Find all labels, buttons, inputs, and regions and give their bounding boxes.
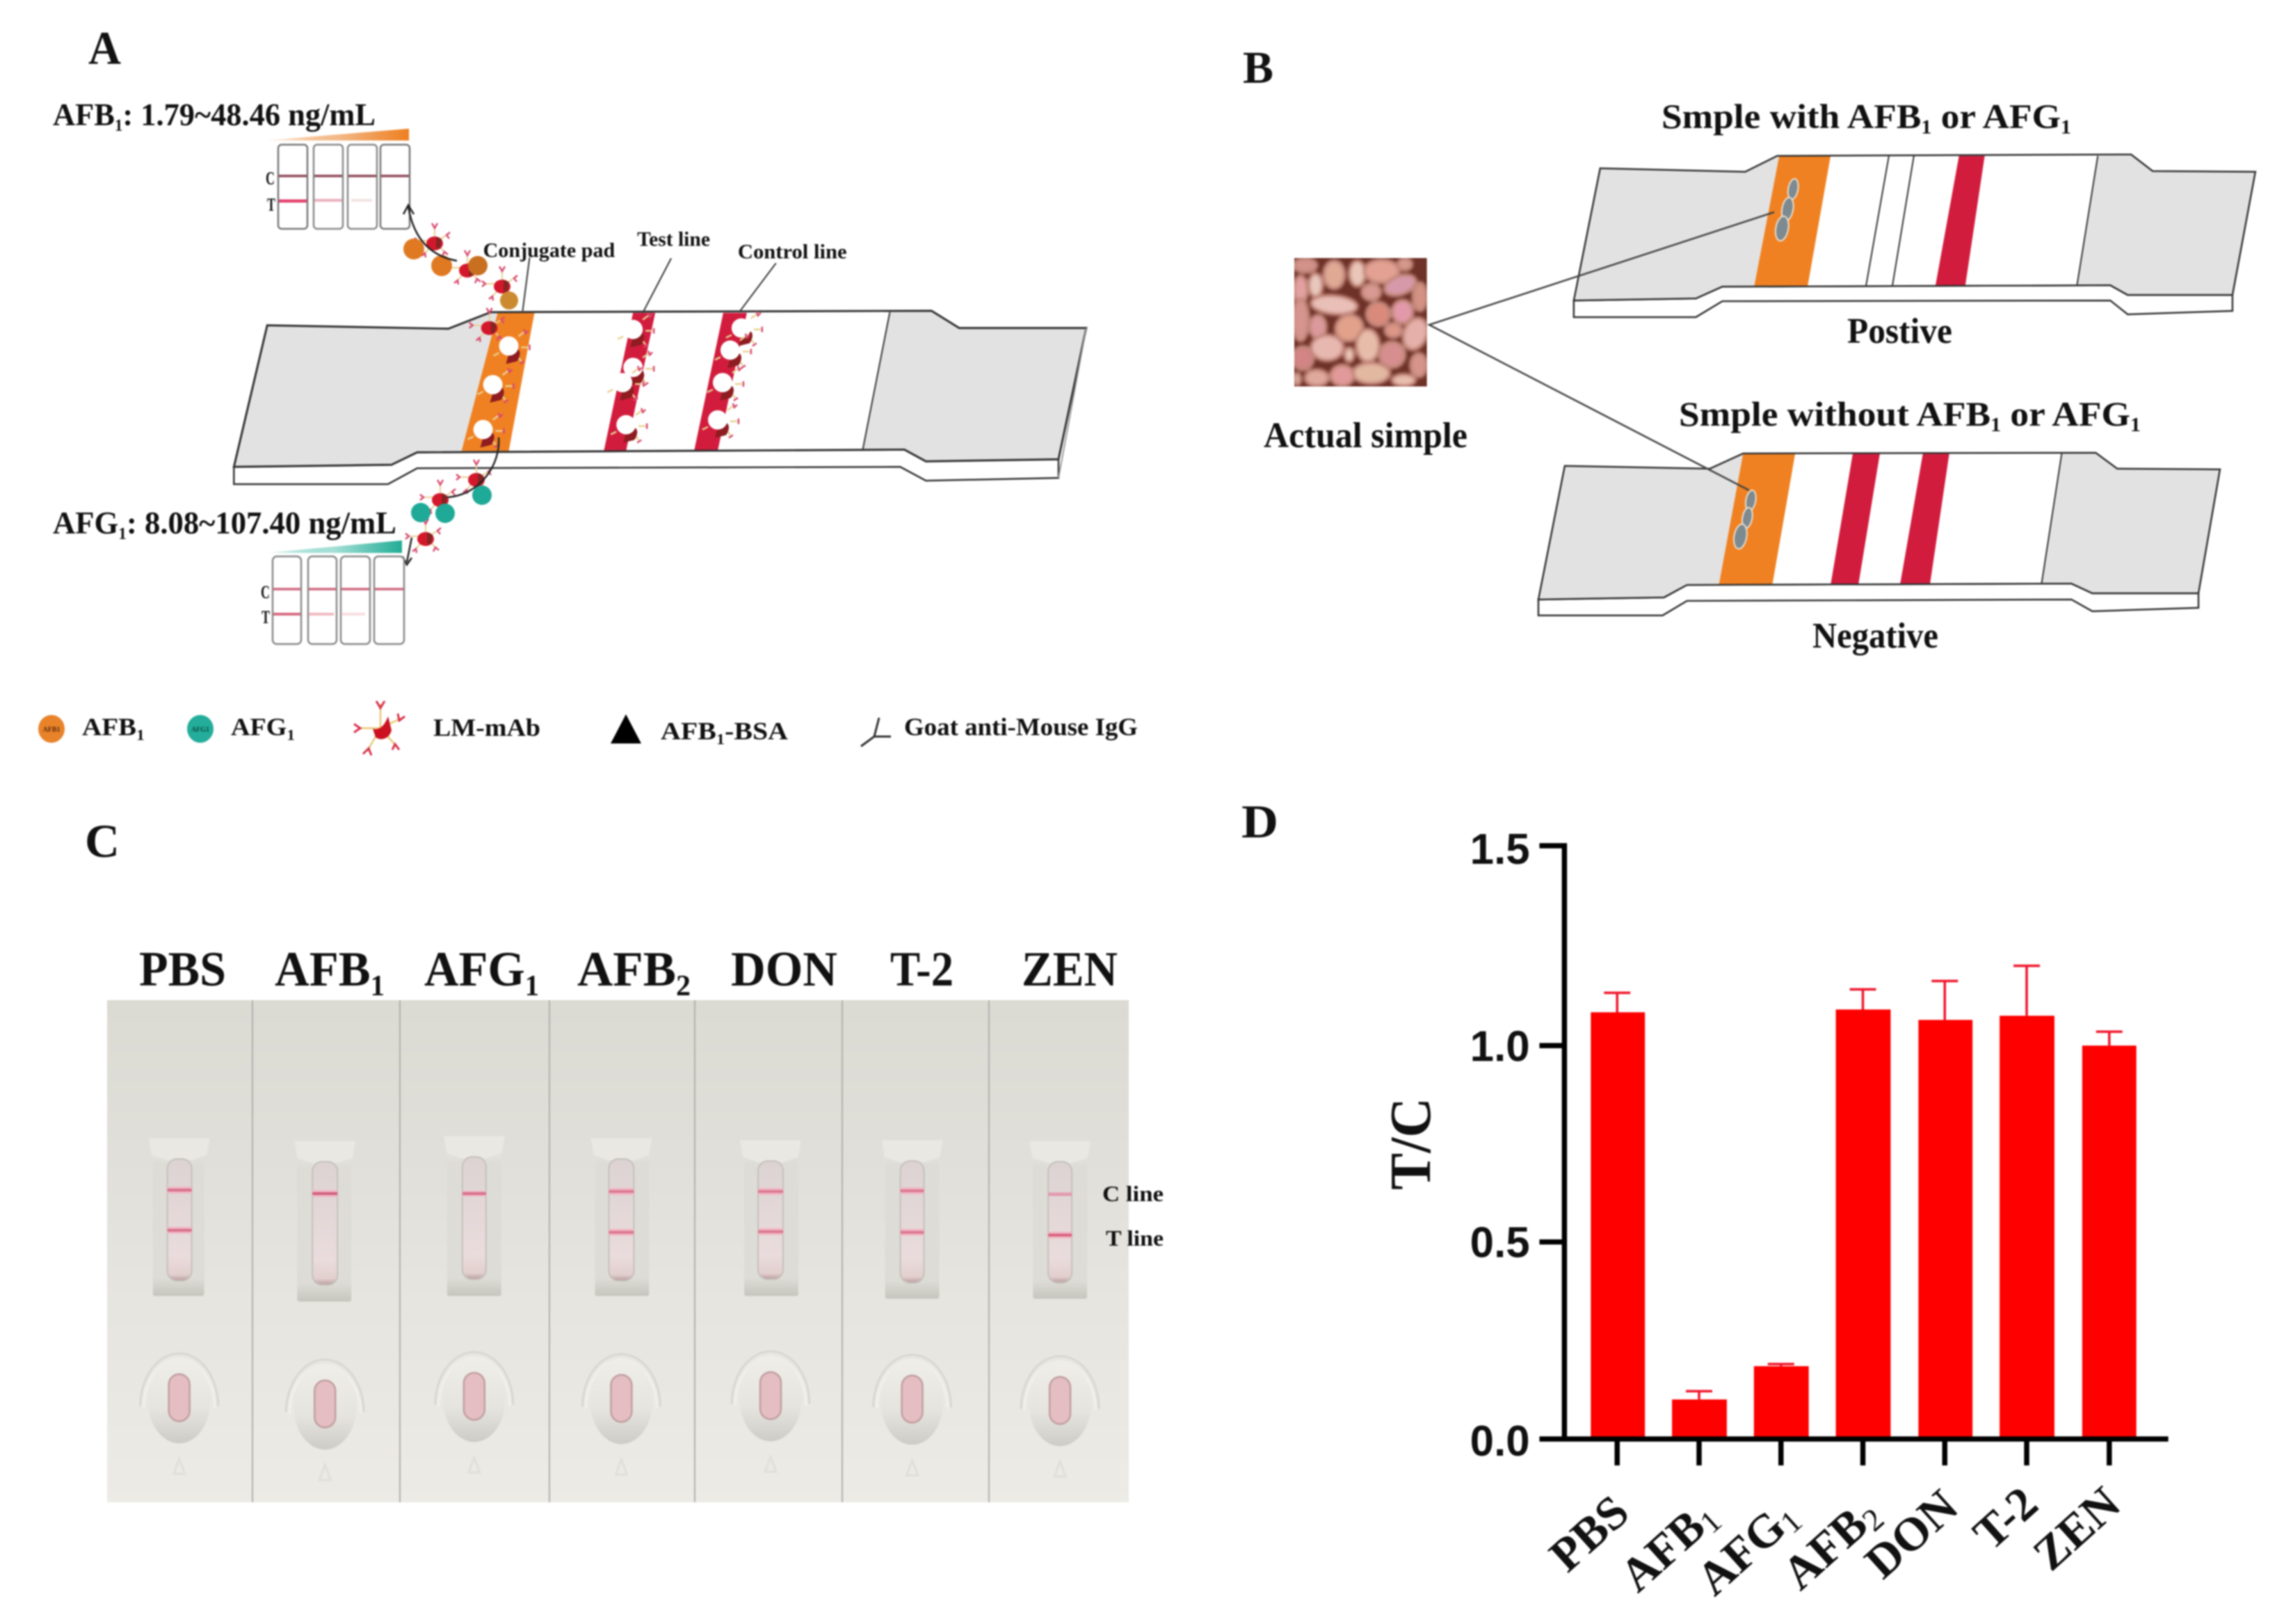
diagram: main test strip	[234, 311, 1086, 484]
icon: AFB1 particle: AFB1	[43, 726, 60, 734]
text: negative sample heading: Smple without AFB	[1679, 394, 1971, 433]
icon: AFB1 and LM-mAb conjugates	[403, 223, 518, 309]
x-axis labels: DON	[1855, 1479, 1968, 1589]
panel: A lateral flow strip schematic	[38, 22, 1138, 755]
text: AFB1 legend: AFB	[82, 713, 132, 741]
icon: AFB1-BSA triangle	[611, 714, 641, 743]
text: positive sample heading: 1	[1921, 117, 1931, 138]
labels: sample names: AFB	[275, 942, 373, 997]
label: test line: Test line	[637, 228, 710, 250]
cassette: T-2	[874, 1140, 951, 1475]
icon: AFG1 and LM-mAb conjugates	[405, 460, 492, 553]
cassette: AFG1	[435, 1136, 513, 1472]
y-axis title: T/C	[1378, 1098, 1443, 1190]
label: control line	[738, 240, 847, 312]
text: positive sample heading: 1	[2061, 117, 2071, 138]
panel: B sample testing	[1243, 42, 2255, 656]
x-axis labels: 1	[1693, 1503, 1728, 1540]
icon: goat anti-mouse IgG	[861, 718, 891, 746]
x-axis labels	[1540, 1477, 2130, 1607]
image: peanut sample	[1292, 258, 1432, 387]
text: negative sample heading: 1	[1990, 415, 2001, 436]
heading: panel letter C: C	[85, 814, 120, 867]
icon: AFB1 concentration wedge	[264, 129, 409, 140]
cassette: DON	[732, 1140, 810, 1472]
y-axis numbers: 0.5	[1470, 1219, 1530, 1267]
x-axis labels: AFG	[1687, 1500, 1796, 1605]
labels: sample names: 1	[525, 970, 539, 1002]
cassette: AFB1	[286, 1141, 364, 1480]
text: LM-mAb legend: LM-mAb	[433, 714, 540, 741]
text: positive sample heading: Smple with AFB	[1662, 97, 1905, 136]
labels: sample names: 2	[676, 970, 691, 1002]
x-axis labels: 1	[1773, 1503, 1809, 1540]
y-axis numbers: 0.0	[1470, 1417, 1530, 1465]
icon: AFG1 concentration wedge	[264, 540, 402, 553]
icon: LM-mAb	[354, 701, 405, 755]
text: AFB1 detection range: : 1.79~48.46 ng/mL	[122, 97, 376, 132]
text: negative sample heading: or AFG	[2001, 394, 2130, 433]
text: AFB1-BSA legend: 1	[716, 730, 725, 748]
text: positive caption: Postive	[1847, 312, 1952, 351]
x-axis labels: 2	[1855, 1501, 1891, 1538]
icon: AFB1 particle	[38, 715, 65, 743]
axes	[1539, 846, 2169, 1465]
labels: sample names: 1	[371, 970, 385, 1002]
panel: C specificity test photos	[85, 814, 1164, 1502]
labels: sample names: AFG	[424, 942, 529, 997]
bars with error bars	[1591, 966, 2137, 1439]
legend: symbols	[38, 701, 1138, 755]
arrow: flow to AFB1 strips	[403, 205, 457, 261]
image: photo of test cassettes	[107, 1000, 1129, 1502]
text: actual sample caption: Actual simple	[1264, 416, 1467, 456]
text: negative sample heading: 1	[2130, 415, 2141, 436]
label: test line	[637, 228, 710, 313]
chart: AFG1 mini test strips: C	[261, 582, 270, 602]
cassette: AFB2	[583, 1139, 660, 1474]
arrow: sample lines to strips	[1429, 212, 1774, 490]
cassette: ZEN	[1021, 1141, 1099, 1477]
text: negative caption: Negative	[1812, 616, 1938, 656]
chart: AFB1 mini test strips	[266, 145, 410, 229]
label: conjugate pad	[483, 239, 616, 311]
chart: AFG1 mini test strips	[261, 556, 404, 644]
heading: panel letter B: B	[1243, 42, 1273, 93]
y-axis numbers: 1.0	[1470, 1022, 1530, 1070]
text: AFB1 legend: 1	[136, 726, 145, 743]
x-axis labels: T-2	[1963, 1477, 2047, 1560]
text: AFG1 legend: 1	[287, 726, 295, 743]
labels: sample names: ZEN	[1022, 942, 1118, 997]
chart: AFB1 mini test strips: C	[266, 168, 275, 188]
panel: D T/C bar chart	[1241, 795, 2169, 1607]
y-axis numbers: 1.5	[1470, 826, 1530, 874]
arrow: flow to AFG1 strips	[403, 437, 499, 565]
label: control line: Control line	[738, 240, 847, 263]
x-axis labels: AFB	[1772, 1498, 1877, 1600]
cassette: PBS	[140, 1139, 218, 1474]
label: T line: T line	[1106, 1225, 1164, 1251]
text: AFB1 detection range: AFB	[53, 97, 117, 132]
text: AFG1 detection range: : 8.08~107.40 ng/mL	[127, 505, 396, 540]
icon: AFG1 particle	[187, 715, 214, 743]
x-axis labels: AFB	[1610, 1500, 1715, 1602]
diagram: positive strip	[1574, 154, 2255, 317]
x-axis labels: ZEN	[2023, 1477, 2130, 1580]
icon: antibody particles on conjugate pad and lines	[468, 308, 762, 447]
labels: sample names	[139, 942, 1118, 1002]
label: conjugate pad: Conjugate pad	[483, 239, 616, 262]
text: goat anti-mouse IgG legend: Goat anti-Mouse IgG	[904, 713, 1138, 741]
text: AFG1 detection range: 1	[118, 525, 127, 543]
labels: sample names: T-2	[890, 942, 954, 997]
text: AFB1-BSA legend: AFB	[661, 717, 711, 745]
x-axis labels: PBS	[1540, 1485, 1639, 1582]
text: AFG1 detection range: AFG	[53, 505, 120, 540]
icon: AFG1 particle: AFG1	[191, 726, 209, 734]
labels: sample names: AFB	[577, 942, 676, 997]
bar chart: T/C ratio	[1378, 826, 2169, 1607]
labels: sample names: PBS	[139, 942, 226, 997]
labels: sample names: DON	[731, 942, 837, 997]
chart: AFB1 mini test strips: T	[267, 195, 275, 215]
text: AFG1 legend: AFG	[231, 713, 284, 741]
chart: AFG1 mini test strips: T	[262, 607, 270, 627]
heading: panel letter D: D	[1241, 795, 1278, 848]
y-axis numbers	[1470, 826, 1530, 1465]
label: C line: C line	[1102, 1181, 1164, 1206]
text: positive sample heading: or AFG	[1931, 97, 2061, 136]
text: AFB1-BSA legend: -BSA	[725, 717, 788, 745]
heading: panel letter A: A	[88, 22, 121, 74]
diagram: negative strip	[1538, 453, 2220, 616]
text: AFB1 detection range: 1	[115, 117, 122, 135]
